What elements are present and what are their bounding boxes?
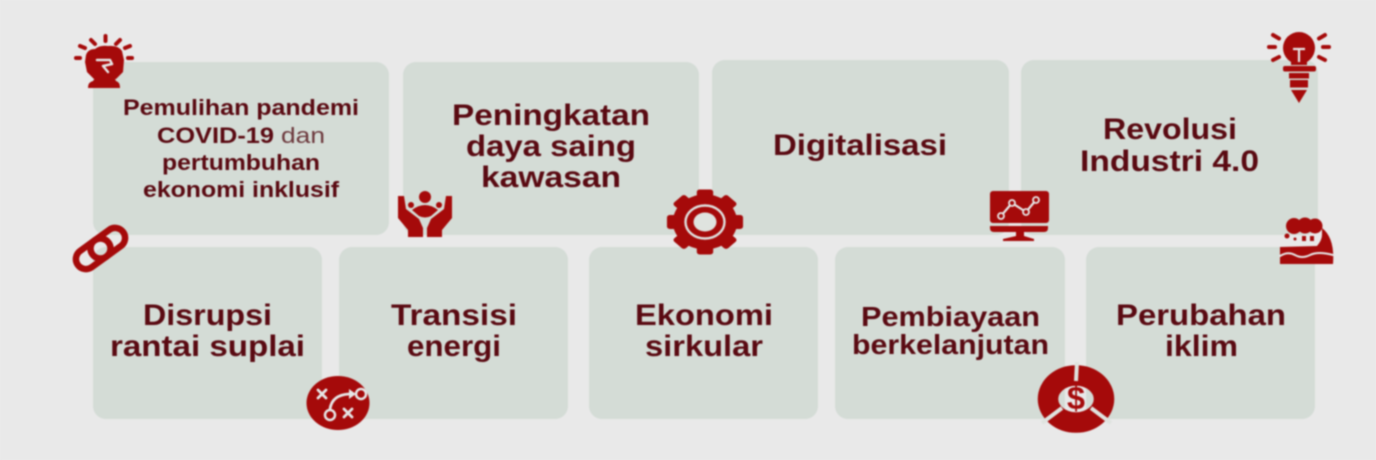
text: Revolusi Industri 4.0: Revolusi	[1103, 113, 1237, 146]
text: Pemulihan pandemi COVID-19 dan pertumbuhan ekonomi inklusif: ekonomi inklusif	[143, 177, 340, 202]
text: Ekonomi sirkular	[635, 299, 773, 363]
panel: Transisi energi	[339, 247, 568, 419]
panel: Disrupsi rantai suplai	[93, 247, 322, 419]
text: Pemulihan pandemi COVID-19 dan pertumbuhan ekonomi inklusif: dan	[281, 123, 325, 148]
text: Digitalisasi: Digitalisasi	[773, 129, 947, 162]
text: Pembiayaan berkelanjutan	[852, 301, 1049, 360]
text: Pemulihan pandemi COVID-19 dan pertumbuhan ekonomi inklusif: Pemulihan pandemi	[123, 95, 359, 120]
icon: strategy circle	[306, 376, 370, 430]
text: Perubahan iklim	[1116, 299, 1286, 363]
text: Pembiayaan berkelanjutan: Pembiayaan	[861, 301, 1040, 332]
icon: light bulb	[1269, 32, 1329, 103]
panel: Digitalisasi	[712, 60, 1009, 235]
text: Perubahan iklim: Perubahan	[1116, 299, 1286, 332]
panel: Perubahan iklim	[1086, 247, 1315, 419]
icon: climate cloud and wave	[1280, 218, 1333, 264]
icon: monitor with line chart	[990, 191, 1049, 241]
icon: chain link	[72, 224, 129, 273]
panel: Pembiayaan berkelanjutan	[835, 247, 1065, 419]
text: Disrupsi rantai suplai: rantai suplai	[110, 330, 305, 363]
icon: dollar segmented ring: $	[1067, 380, 1085, 416]
panel: Pemulihan pandemi	[93, 62, 389, 235]
icon: raised fist	[76, 36, 132, 88]
icon: hands holding person	[398, 191, 452, 237]
text: Revolusi Industri 4.0	[1080, 113, 1259, 178]
text: Peningkatan daya saing kawasan	[452, 99, 650, 194]
text: Revolusi Industri 4.0: Industri 4.0	[1080, 145, 1259, 178]
text: Pemulihan pandemi COVID-19 dan pertumbuhan ekonomi inklusif: pertumbuhan	[162, 150, 320, 175]
text: Peningkatan daya saing kawasan: daya saing	[466, 130, 636, 163]
text: Disrupsi rantai suplai	[110, 299, 305, 363]
text: Pemulihan pandemi COVID-19 dan pertumbuhan ekonomi inklusif	[123, 95, 359, 202]
icon: gear	[667, 190, 743, 254]
text: Ekonomi sirkular: Ekonomi	[635, 299, 773, 332]
text: Peningkatan daya saing kawasan: Peningkatan	[452, 99, 650, 132]
panel: Ekonomi sirkular	[589, 247, 818, 419]
text: Disrupsi rantai suplai: Disrupsi	[143, 299, 272, 332]
text: Transisi energi: energi	[407, 330, 501, 363]
text: Perubahan iklim: iklim	[1165, 330, 1238, 363]
text: Transisi energi	[391, 299, 517, 363]
panel: Peningkatan daya saing kawasan	[403, 62, 699, 235]
text: Peningkatan daya saing kawasan: kawasan	[481, 161, 621, 194]
text: Pemulihan pandemi COVID-19 dan pertumbuhan ekonomi inklusif: COVID-19	[157, 123, 274, 148]
text: Pembiayaan berkelanjutan: berkelanjutan	[852, 329, 1049, 360]
panel: Revolusi Industri 4.0	[1021, 60, 1318, 235]
text: Ekonomi sirkular: sirkular	[645, 330, 764, 363]
icon: dollar segmented ring	[1042, 362, 1111, 423]
text: Transisi energi: Transisi	[391, 299, 517, 332]
